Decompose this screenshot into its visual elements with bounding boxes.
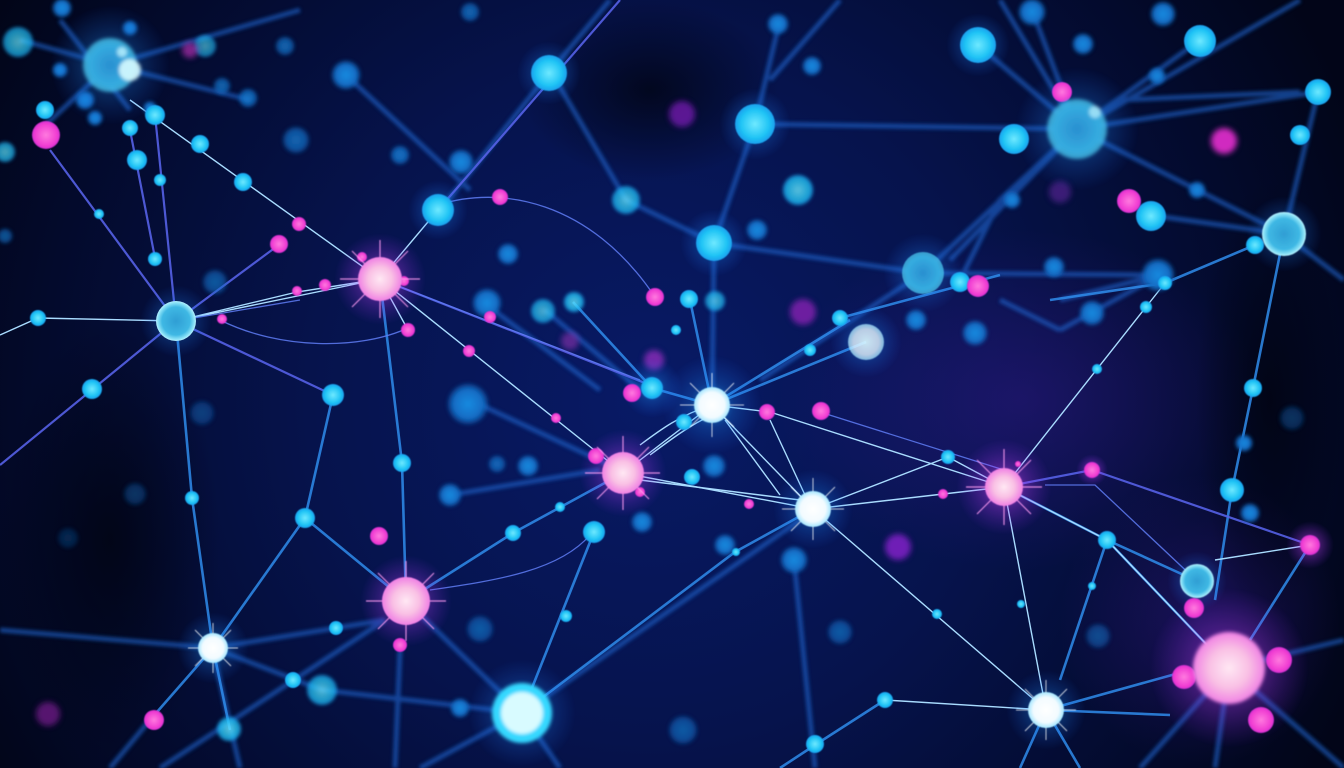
blurred purple distant nodes <box>36 42 1237 726</box>
thin bright connections <box>0 100 1310 710</box>
hub: bottom bright cyan <box>492 683 552 743</box>
hub: upper right teal <box>1262 212 1306 256</box>
hub: lower left cyan <box>188 623 238 673</box>
hub: left teal <box>156 301 196 341</box>
hub: pale teal <box>1180 564 1214 598</box>
hub: large pink <box>1193 632 1265 704</box>
hub: right pink <box>966 449 1042 525</box>
hub: centre pink <box>585 436 660 510</box>
hub: top right large teal <box>1047 99 1107 159</box>
hub: centre white <box>680 373 744 437</box>
hub: cyan nodes <box>422 27 996 399</box>
hub: top left large teal <box>83 38 141 92</box>
hub: upper pink <box>340 240 420 318</box>
hub: middle right teal <box>902 252 944 294</box>
hub: bottom right white <box>1016 680 1076 740</box>
hub: lower left pink <box>366 561 446 641</box>
hub: lower white <box>782 478 844 540</box>
